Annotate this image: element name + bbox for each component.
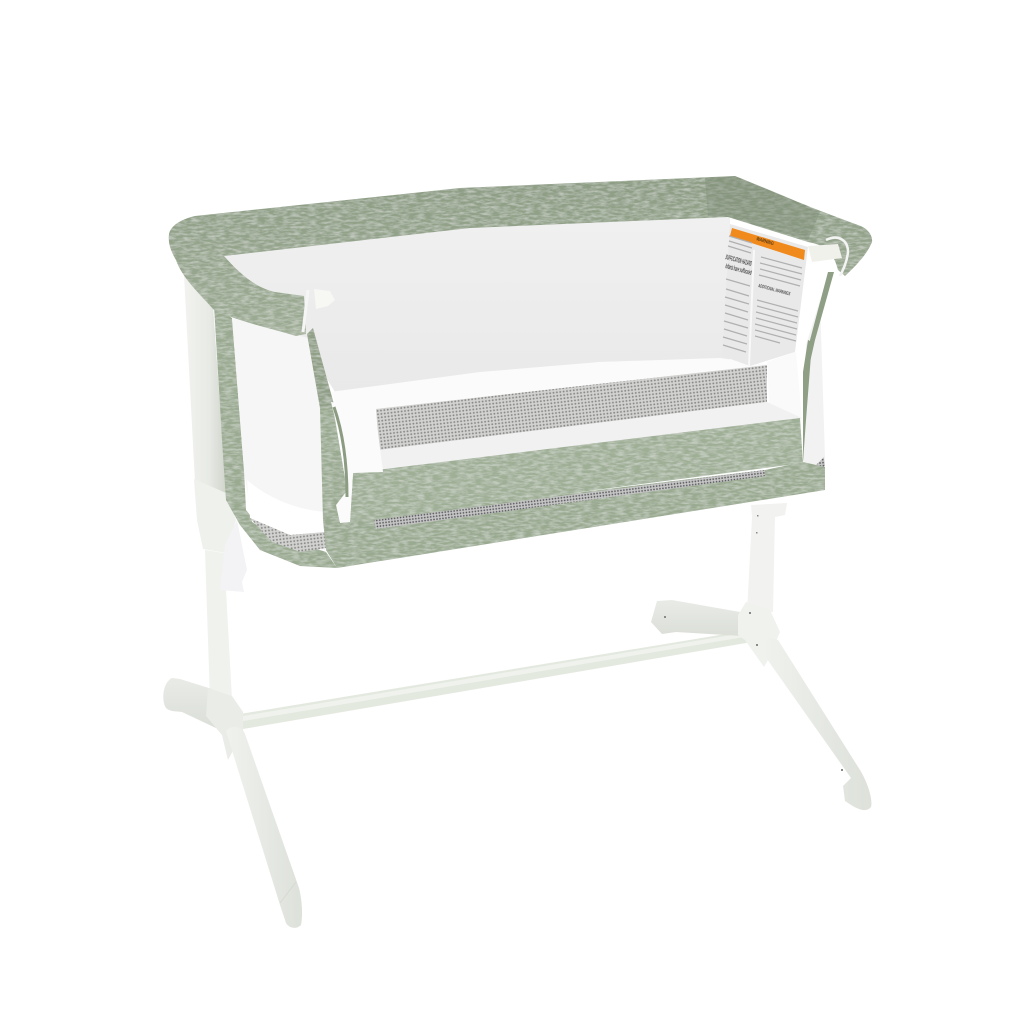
right end mesh and fabric [803,272,834,480]
left back foot [163,678,222,728]
left side panel green frame [214,306,337,568]
right leg assembly [651,503,871,810]
left white fabric flap [331,402,383,523]
warning label [722,224,808,366]
left zip tab and cord [303,289,335,332]
left leg assembly [163,550,752,928]
label sheet [722,224,808,366]
right white fabric flap [767,352,802,420]
zip cord [303,290,308,332]
left side mesh window [232,318,326,552]
additional warnings heading: ADDITIONAL WARNINGS [757,283,791,298]
hazard text [724,254,752,277]
window mesh [232,318,325,550]
crossbar highlight [243,632,750,721]
front folded flap [350,418,803,522]
left front leg [226,727,302,928]
left leg tip seam [280,882,296,903]
warning word: WARNING [755,236,774,247]
warning label: Infants have suffocated [724,263,752,277]
right upper post [747,503,787,612]
white clip [314,289,335,309]
left height strap [220,520,247,592]
label fold [749,250,754,366]
right end window [803,300,825,478]
right front leg [762,637,871,810]
front gray mesh band [376,365,767,450]
right side trim below label [803,340,812,462]
flap panel [331,402,383,523]
orange warning band [730,228,805,260]
mattress surface [330,358,770,410]
right back foot [651,600,742,636]
left rear post and sleeve [184,275,247,592]
right side trim [803,272,834,462]
right zip tab and cord [808,238,848,276]
left joint [206,688,243,760]
under flap dark mesh strip [374,470,765,529]
left sleeve [194,479,236,553]
bottom green body [320,407,825,568]
right corner mesh bottom [803,457,825,480]
rim dark fold on right corner [705,176,820,240]
screw dots [664,515,843,771]
crossbar [240,630,752,729]
white clip [808,244,842,262]
green strip beside window [307,328,335,408]
cord loop [826,238,848,276]
zip trim [334,407,347,497]
window mesh bottom [250,518,326,552]
label text lines [723,236,802,352]
warning label: SUFFOCATION HAZARD [724,254,752,268]
front lower white mesh [379,402,802,474]
window mattress edge [247,480,325,535]
top rim band [169,176,872,336]
left rear post [184,275,226,494]
inner mesh back wall [222,216,730,392]
left lower post [205,550,232,700]
right joint [738,602,780,667]
